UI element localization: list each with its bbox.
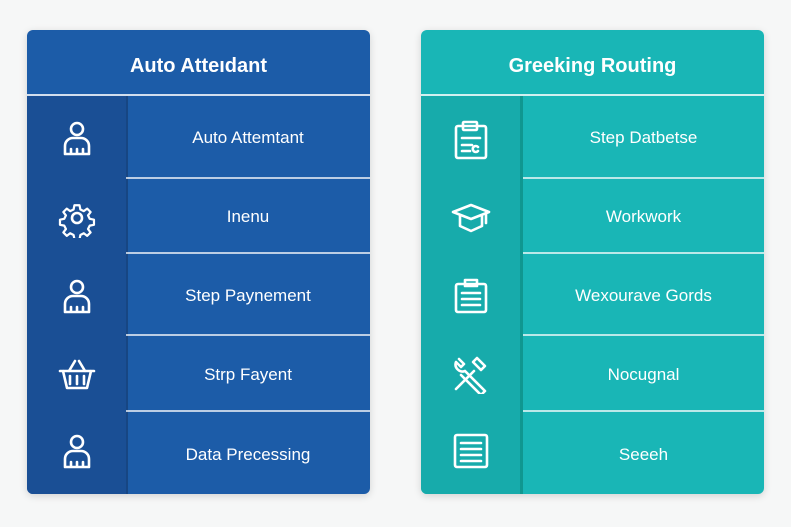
icon column right — [421, 96, 523, 494]
panel: left — [27, 30, 370, 494]
row: Strp Fayent — [126, 336, 370, 412]
heading left — [27, 30, 370, 96]
icon: person 2 — [64, 280, 90, 314]
icon: document — [454, 434, 488, 468]
row: Data Precessing: Data Precessing — [186, 444, 310, 464]
row: Step Datbetse: Step Datbetse — [590, 128, 697, 147]
icon: list — [454, 278, 488, 314]
icon: gear — [58, 204, 96, 238]
heading left: Auto Atteıdant — [130, 55, 267, 77]
row: Wexourave Gords — [523, 254, 764, 336]
row: Nocugnal: Nocugnal — [608, 364, 679, 384]
row: Workwork: Workwork — [606, 207, 681, 226]
row: Step Datbetse — [523, 96, 764, 179]
icon column left — [27, 96, 128, 494]
icon: person 3 — [64, 434, 90, 468]
icon: cap — [452, 204, 490, 232]
row: Nocugnal — [523, 336, 764, 412]
icon: basket — [58, 360, 96, 390]
icon: clipboard — [454, 120, 488, 160]
row: Strp Fayent: Strp Fayent — [204, 364, 292, 384]
heading right — [421, 30, 764, 96]
row: Wexourave Gords: Wexourave Gords — [575, 286, 712, 304]
icon: tools — [454, 356, 486, 394]
row: Workwork — [523, 179, 764, 254]
row: Seeeh: Seeeh — [619, 444, 668, 464]
heading right: Greeking Routing — [509, 55, 676, 77]
row: Auto Attemtant: Auto Attemtant — [192, 128, 304, 147]
row: Inenu — [126, 179, 370, 254]
panel: right — [421, 30, 764, 494]
row: Inenu: Inenu — [227, 207, 269, 226]
row: Step Paynement: Step Paynement — [185, 286, 311, 304]
row: Auto Attemtant — [126, 96, 370, 179]
icon: person — [64, 122, 90, 156]
row: Step Paynement — [126, 254, 370, 336]
